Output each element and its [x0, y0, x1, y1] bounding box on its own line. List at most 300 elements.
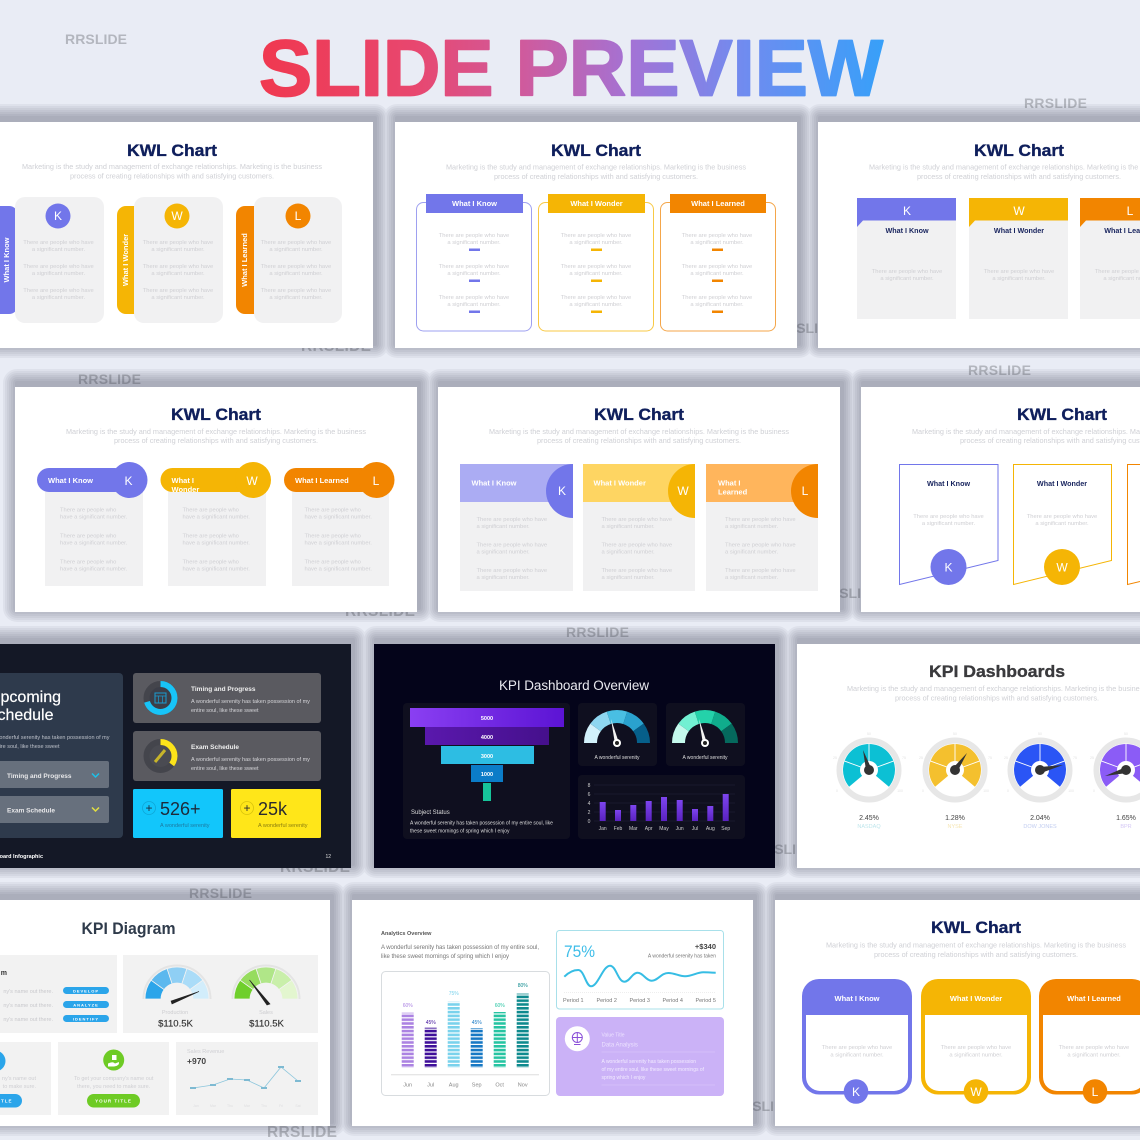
column: what I wonder: There are people who have	[602, 568, 672, 574]
column: what I know: What I Know	[2, 237, 11, 282]
column: what I learned: What I Learned	[691, 199, 745, 208]
list panel: ny's name out there.	[3, 1017, 53, 1023]
gauge: Dow Jones: 25	[1004, 756, 1008, 760]
card: what I wonder	[921, 979, 1031, 1104]
gauge: green: A wonderful serenity	[682, 755, 728, 761]
column: what I know: a significant number.	[447, 240, 501, 246]
column: what I wonder: There are people who have	[561, 264, 631, 270]
card: blue: to make sure.	[3, 1084, 36, 1090]
gauge: NYSE: 100	[983, 789, 989, 793]
card: blue: ny's name out	[2, 1076, 36, 1082]
column: what I wonder: a significant number.	[569, 302, 623, 308]
bar chart: Feb	[614, 826, 623, 832]
watermarks: RRSLIDE	[280, 859, 350, 876]
gauges panel: Sales	[259, 1010, 273, 1016]
column: L	[1080, 198, 1140, 319]
stat: 25k: 25k	[258, 799, 288, 819]
column: what I know	[37, 462, 148, 586]
panel: KWL chart pill headers	[15, 387, 417, 612]
column: what I know: What I Know	[472, 478, 517, 488]
panel: KPI dashboards: Marketing is the study and management of exchange relationships. Marketing is the business	[847, 684, 1140, 693]
column: what I wonder: W	[246, 474, 258, 488]
striped bar chart	[382, 972, 550, 1096]
watermarks: RRSLIDE	[301, 338, 371, 355]
bar chart: Jul	[692, 826, 698, 832]
panel: KWL chart side tabs: process of creating relationships with and satisfying customers.	[70, 172, 274, 180]
column: what I learned: What I Learned	[240, 233, 249, 287]
column: W: What I Wonder	[994, 226, 1044, 235]
gauge: NASDAQ	[833, 732, 906, 830]
data analysis card: Value Title	[602, 1032, 625, 1038]
column: what I wonder: There are people who have	[143, 288, 213, 294]
line chart: sales revenue: Sales Revenue	[187, 1049, 224, 1055]
column: what I know: have a significant number.	[60, 514, 128, 520]
column: what I wonder: have a significant number.	[182, 514, 250, 520]
list panel: ny's name out there.	[3, 1003, 53, 1009]
funnel chart: 3000	[481, 754, 493, 760]
column: what I wonder: Wonder	[172, 485, 199, 494]
column: what I wonder: There are people who have	[1027, 514, 1097, 520]
wave chart card: Period 3	[629, 998, 650, 1004]
card: what I wonder: There are people who have	[941, 1045, 1011, 1051]
panel: KWL chart half circles: Marketing is the study and management of exchange relationships. Marketing is the business	[489, 427, 789, 436]
stat: 526+	[133, 789, 223, 838]
column: what I wonder: a significant number.	[1035, 521, 1089, 527]
striped bar chart: 60%	[403, 1003, 413, 1009]
column: what I learned: a significant number.	[725, 550, 779, 556]
column: what I learned: What I Learned	[295, 476, 349, 485]
card: timing and progress: A wonderful serenity has taken possession of my	[191, 699, 310, 705]
column: what I know: K	[558, 484, 566, 498]
column: what I learned	[236, 197, 342, 323]
column: what I know	[416, 194, 532, 331]
panel: KWL chart half circles	[438, 387, 840, 612]
column: what I wonder: a significant number.	[151, 271, 205, 277]
column: what I wonder: There are people who have	[561, 295, 631, 301]
line chart: sales revenue: Sat	[295, 1104, 301, 1108]
bar chart: Jan	[599, 826, 607, 832]
funnel chart: these sweet mornings of spring which I enjoy	[410, 828, 510, 834]
striped bar chart: Oct	[495, 1082, 504, 1088]
gauge: green	[666, 703, 745, 766]
panel: KPI diagram	[0, 900, 330, 1126]
bar chart: Aug	[706, 826, 715, 832]
column: what I wonder: have a significant number.	[182, 540, 250, 546]
watermarks: RRSLIDE	[345, 603, 415, 620]
column: what I know: What I Know	[48, 476, 93, 485]
column: what I learned: a significant number.	[725, 524, 779, 530]
footer: 12	[325, 854, 331, 860]
gauge: NYSE: 75	[988, 756, 992, 760]
striped bar chart: 45%	[426, 1020, 436, 1026]
column: what I learned: There are people who	[304, 534, 361, 540]
funnel chart: 4000	[481, 735, 493, 741]
data analysis card: of my entire soul, like these sweet mornings of	[602, 1067, 705, 1073]
column: what I learned: There are people who have	[725, 542, 796, 548]
gauge: NASDAQ: 0	[836, 789, 838, 793]
panel: KPI dashboard overview	[374, 644, 775, 868]
panel: KWL chart side tabs: KWL Chart	[127, 141, 217, 160]
striped bar chart: 80%	[518, 983, 528, 989]
striped bar chart: Jul	[427, 1082, 434, 1088]
gauge: NASDAQ: 50	[867, 732, 871, 736]
gauge: BPR: 1.65%	[1116, 815, 1136, 822]
watermarks: RRSLIDE	[754, 841, 815, 857]
panel: analytics overview	[352, 900, 753, 1126]
list panel	[0, 955, 117, 1033]
column: what I wonder: a significant number.	[602, 524, 655, 530]
column: what I know	[0, 197, 104, 323]
column: what I wonder: There are people who have	[602, 517, 672, 523]
bar chart: 0	[588, 819, 591, 825]
card: what I wonder: a significant number.	[949, 1052, 1003, 1058]
column: what I learned: There are people who have	[725, 517, 796, 523]
panel: KWL chart outlined boxes: KWL Chart	[551, 141, 641, 160]
bar chart: Mar	[629, 826, 638, 832]
panel: KPI dashboards: process of creating relationships with and satisfying customers.	[895, 694, 1099, 702]
heading and text: like these sweet mornings of spring which I enjoy	[381, 954, 509, 960]
column: what I know	[900, 464, 998, 585]
column: what I wonder: W	[171, 209, 183, 223]
column: what I learned: There are people who have	[682, 295, 752, 301]
panel: KWL chart letter headers: process of creating relationships with and satisfying customers.	[917, 172, 1121, 181]
panel: KWL chart side tabs: Marketing is the study and management of exchange relationships. Marketing is the business	[22, 162, 322, 171]
card: exam schedule	[133, 731, 321, 781]
wave chart card: +$340	[695, 942, 716, 951]
column: what I learned: L	[295, 209, 302, 223]
funnel chart: 1000	[481, 772, 493, 778]
column: what I learned: a significant number.	[725, 575, 779, 581]
gauge: NASDAQ: 100	[897, 789, 903, 793]
funnel chart: Subject Status	[411, 810, 450, 816]
gauge: BPR: BPR	[1120, 824, 1132, 830]
column: what I wonder: a significant number.	[569, 240, 623, 246]
watermarks: RRSLIDE	[819, 585, 880, 601]
striped bar chart: 45%	[472, 1020, 482, 1026]
gauge: Dow Jones: 2.04%	[1030, 815, 1050, 822]
column: what I wonder: a significant number.	[151, 247, 205, 253]
panel: KWL chart outlined boxes	[395, 122, 797, 348]
column: what I wonder: What I Wonder	[1037, 479, 1087, 488]
column: what I know: have a significant number.	[60, 540, 128, 546]
gauge: Dow Jones	[1004, 732, 1077, 830]
line chart: sales revenue: Mar	[210, 1104, 217, 1108]
gauge: NASDAQ: 2.45%	[859, 815, 879, 822]
column: what I know: have a significant number.	[60, 566, 128, 572]
column: what I wonder: There are people who	[182, 534, 239, 540]
card: green	[58, 1042, 169, 1115]
column: what I wonder: What I	[172, 476, 194, 485]
line chart: sales revenue	[176, 1042, 318, 1115]
column: what I know: a significant number.	[476, 550, 530, 556]
column: what I wonder: What I Wonder	[570, 199, 623, 208]
bar chart: Apr	[645, 826, 653, 832]
gauge: production	[144, 966, 210, 1004]
gauge: BPR: 0	[1093, 789, 1095, 793]
gauge: sales	[232, 966, 300, 1005]
column: what I know: a significant number.	[447, 302, 501, 308]
schedule sidebar: Timing and Progress	[7, 773, 72, 780]
column: what I wonder: There are people who	[182, 560, 239, 566]
gauges panel: Production	[162, 1010, 188, 1016]
column: what I know: There are people who	[60, 508, 116, 514]
column: what I learned: a significant number.	[269, 247, 323, 253]
card: what I wonder: What I Wonder	[950, 994, 1002, 1003]
panel: KWL chart letter headers	[818, 122, 1140, 348]
column: what I wonder: What I Wonder	[594, 478, 646, 488]
column: what I learned: a significant number.	[690, 240, 744, 246]
bar chart: 8	[588, 783, 591, 789]
card: what I know: K	[852, 1085, 860, 1099]
line chart: sales revenue: Mar	[244, 1104, 251, 1108]
column: what I know: a significant number.	[476, 575, 530, 581]
column: what I learned: a significant number.	[269, 295, 323, 301]
column: what I wonder: a significant number.	[602, 575, 655, 581]
schedule sidebar: Exam Schedule	[7, 808, 55, 814]
data analysis card	[556, 1017, 724, 1096]
column: what I learned	[284, 462, 394, 586]
data analysis card: Data Analysis	[602, 1042, 638, 1048]
column: what I learned: have a significant number.	[304, 514, 372, 520]
column: K: a significant number.	[880, 276, 934, 282]
gauge: NYSE	[919, 732, 992, 830]
watermarks: RRSLIDE	[1024, 95, 1087, 111]
column: W: W	[1013, 204, 1025, 218]
striped bar chart: Sep	[472, 1082, 482, 1088]
wave chart card: Period 2	[596, 998, 617, 1004]
watermarks: RRSLIDE	[776, 320, 837, 336]
gauge: Dow Jones: 50	[1038, 732, 1042, 736]
card: exam schedule: entire soul, like these sweet	[191, 766, 259, 772]
card: green: YOUR TITLE	[95, 1098, 132, 1104]
watermarks: RRSLIDE	[65, 31, 127, 47]
column: what I know: K	[944, 560, 953, 574]
card: green: there, you need to make sure.	[77, 1084, 151, 1090]
panel: KWL chart rounded cards: KWL Chart	[931, 918, 1021, 937]
panel: KWL chart outlined boxes: process of creating relationships with and satisfying customers.	[494, 172, 698, 181]
panel: KWL chart pill headers: Marketing is the study and management of exchange relationships. Marketing is the business	[66, 427, 366, 436]
column: W	[969, 198, 1068, 319]
column: what I wonder: There are people who have	[143, 264, 213, 270]
panel: KWL chart half circles: process of creating relationships with and satisfying customers.	[537, 436, 741, 445]
column: what I learned: have a significant number.	[304, 566, 372, 572]
list panel: ANALYZE	[73, 1002, 99, 1007]
bar chart: Jun	[676, 826, 684, 832]
gauge: BPR: 50	[1124, 732, 1128, 736]
watermarks: RRSLIDE	[566, 624, 629, 640]
column: what I wonder: What I Wonder	[121, 234, 130, 286]
column: what I wonder: There are people who have	[561, 233, 631, 239]
panel: upcoming schedule dashboard	[0, 644, 351, 868]
gauges panel: $110.5K	[249, 1018, 284, 1030]
column: what I wonder: W	[1056, 560, 1068, 574]
card: what I know: There are people who have	[822, 1045, 892, 1051]
column: what I learned: There are people who have	[261, 240, 331, 246]
column: what I learned	[706, 464, 818, 591]
column: what I learned: have a significant number.	[304, 540, 372, 546]
bar chart: May	[659, 826, 669, 832]
column: what I know: There are people who have	[439, 264, 509, 270]
panel: KPI dashboards: KPI Dashboards	[929, 662, 1065, 681]
panel: KPI dashboards	[797, 644, 1140, 868]
line chart: sales revenue: Fri	[279, 1104, 283, 1108]
gauge: Dow Jones: 75	[1073, 756, 1077, 760]
bar chart: 6	[588, 792, 591, 798]
gauges panel: $110.5K	[158, 1018, 194, 1030]
column: what I know: There are people who have	[439, 295, 509, 301]
column: what I learned	[1128, 464, 1140, 584]
column: K: There are people who have	[872, 269, 942, 275]
card: exam schedule: A wonderful serenity has taken possession of my	[191, 757, 310, 763]
column: what I know	[460, 464, 573, 591]
column: W: a significant number.	[992, 276, 1046, 282]
column: what I know: a significant number.	[476, 524, 530, 530]
panel: KWL chart rounded cards	[775, 900, 1140, 1126]
panel: KPI diagram: KPI Diagram	[82, 919, 176, 938]
gauge: NASDAQ: 25	[833, 756, 837, 760]
column: what I know: There are people who have	[23, 240, 94, 246]
column: what I wonder: a significant number.	[602, 550, 655, 556]
gauge: NYSE: 0	[922, 789, 924, 793]
column: what I learned: There are people who have	[261, 288, 331, 294]
column: what I learned: Learned	[718, 488, 748, 496]
card: green: To get your company's name out	[74, 1076, 154, 1082]
column: what I learned: There are people who	[304, 508, 361, 514]
gauge: NYSE: 25	[919, 756, 923, 760]
column: K	[857, 198, 956, 319]
column: what I learned: There are people who have	[725, 568, 796, 574]
column: what I know: K	[54, 209, 62, 223]
card: what I know	[802, 979, 912, 1104]
card: timing and progress: Timing and Progress	[191, 686, 256, 693]
list panel: IDENTIFY	[73, 1016, 99, 1021]
bar chart: 4	[588, 801, 591, 807]
line chart: sales revenue: Thu	[261, 1104, 267, 1108]
column: what I wonder	[117, 197, 223, 323]
column: what I know: What I Know	[927, 479, 970, 488]
gauge: NYSE: NYSE	[948, 824, 963, 830]
striped bar chart: 60%	[495, 1003, 505, 1009]
panel: KWL chart pill headers: process of creating relationships with and satisfying customers.	[114, 436, 318, 445]
gauge: Dow Jones: DOW JONES	[1023, 824, 1057, 830]
stat: 25k	[231, 789, 321, 838]
column: what I know: a significant number.	[32, 295, 85, 301]
wave chart card: A wonderful serenity has taken	[648, 954, 716, 960]
card: what I learned: L	[1092, 1085, 1099, 1099]
striped bar chart: Nov	[518, 1082, 528, 1088]
card: what I learned: There are people who have	[1059, 1045, 1129, 1051]
footer	[0, 854, 331, 860]
column: what I know: There are people who have	[476, 542, 547, 548]
column: what I wonder: There are people who	[182, 508, 239, 514]
bar chart: Sep	[721, 826, 730, 832]
column: what I learned: a significant number.	[690, 271, 744, 277]
panel: KWL chart rounded cards: Marketing is the study and management of exchange relationships. Marketing is the business	[826, 940, 1126, 950]
panel: KWL chart slanted outlines: KWL Chart	[1017, 405, 1107, 424]
watermarks: RRSLIDE	[78, 371, 141, 387]
card: blue	[0, 1042, 51, 1115]
wave chart card: 75%	[564, 943, 595, 961]
stat: 526+: +	[145, 801, 153, 815]
funnel chart	[403, 703, 570, 839]
gauges panel	[123, 955, 318, 1033]
column: what I know: a significant number.	[922, 521, 975, 527]
striped bar chart: 75%	[449, 991, 459, 997]
panel: KPI dashboard overview: KPI Dashboard Overview	[499, 678, 649, 693]
gauge: NYSE: 50	[953, 732, 957, 736]
column: K: K	[903, 204, 911, 218]
column: what I know: There are people who	[60, 560, 116, 566]
list panel: DEVELOP	[73, 988, 99, 993]
column: what I wonder: W	[677, 484, 689, 498]
stat: 526+: 526+	[160, 799, 201, 819]
column: what I learned: a significant number.	[690, 302, 744, 308]
column: what I know: K	[124, 474, 133, 488]
column: what I know: a significant number.	[32, 271, 85, 277]
column: what I wonder: a significant number.	[151, 295, 205, 301]
column: what I wonder	[583, 464, 695, 591]
gauge: Dow Jones: 100	[1068, 789, 1074, 793]
watermarks: RRSLIDE	[732, 1098, 793, 1114]
column: what I learned: There are people who have	[682, 233, 752, 239]
panel: KWL chart rounded cards: process of creating relationships with and satisfying customers.	[874, 950, 1078, 959]
column: what I wonder	[160, 462, 271, 586]
column: what I know: There are people who	[60, 534, 116, 540]
column: what I know: There are people who have	[23, 264, 94, 270]
column: what I know: There are people who have	[476, 517, 547, 523]
card: exam schedule: Exam Schedule	[191, 744, 239, 751]
column: what I wonder: There are people who have	[143, 240, 213, 246]
column: W: There are people who have	[984, 269, 1054, 275]
card: what I know: What I Know	[834, 994, 880, 1003]
column: what I know: a significant number.	[32, 247, 85, 253]
column: what I learned: a significant number.	[269, 271, 323, 277]
gauge: BPR	[1090, 732, 1140, 830]
wave chart card: Period 1	[563, 998, 584, 1004]
panel: KWL chart side tabs	[0, 122, 373, 348]
column: what I know: There are people who have	[23, 288, 94, 294]
heading and text: Analytics Overview	[381, 931, 432, 937]
column: what I know: There are people who have	[476, 568, 547, 574]
card: what I wonder: W	[970, 1085, 982, 1099]
column: what I wonder	[538, 194, 654, 331]
line chart: sales revenue: +970	[187, 1056, 206, 1066]
card: what I learned: What I Learned	[1067, 994, 1121, 1003]
gauge: blue	[578, 703, 657, 766]
watermarks: RRSLIDE	[189, 885, 252, 901]
column: what I learned: There are people who have	[682, 264, 752, 270]
column: what I wonder: a significant number.	[569, 271, 623, 277]
gauge: BPR: 25	[1090, 756, 1094, 760]
funnel chart: 5000	[481, 716, 493, 722]
watermarks: RRSLIDE	[968, 362, 1031, 378]
column: what I learned: L	[802, 484, 809, 498]
column: what I learned	[660, 194, 776, 331]
column: what I wonder	[1014, 464, 1112, 585]
wave chart card: Period 5	[695, 998, 716, 1004]
panel: KWL chart outlined boxes: Marketing is the study and management of exchange relationships. Marketing is the business	[446, 162, 746, 172]
panel: KWL chart slanted outlines	[861, 387, 1140, 612]
column: what I learned: There are people who have	[261, 264, 331, 270]
column: what I learned: L	[373, 474, 380, 488]
bar chart	[578, 775, 745, 839]
panel: KWL chart half circles: KWL Chart	[594, 405, 684, 424]
data analysis card: spring which I enjoy	[602, 1075, 646, 1081]
panel: KWL chart pill headers: KWL Chart	[171, 405, 261, 424]
striped bar chart: Aug	[449, 1082, 459, 1088]
column: what I know: a significant number.	[447, 271, 501, 277]
gauge: NASDAQ: NASDAQ	[857, 824, 881, 830]
